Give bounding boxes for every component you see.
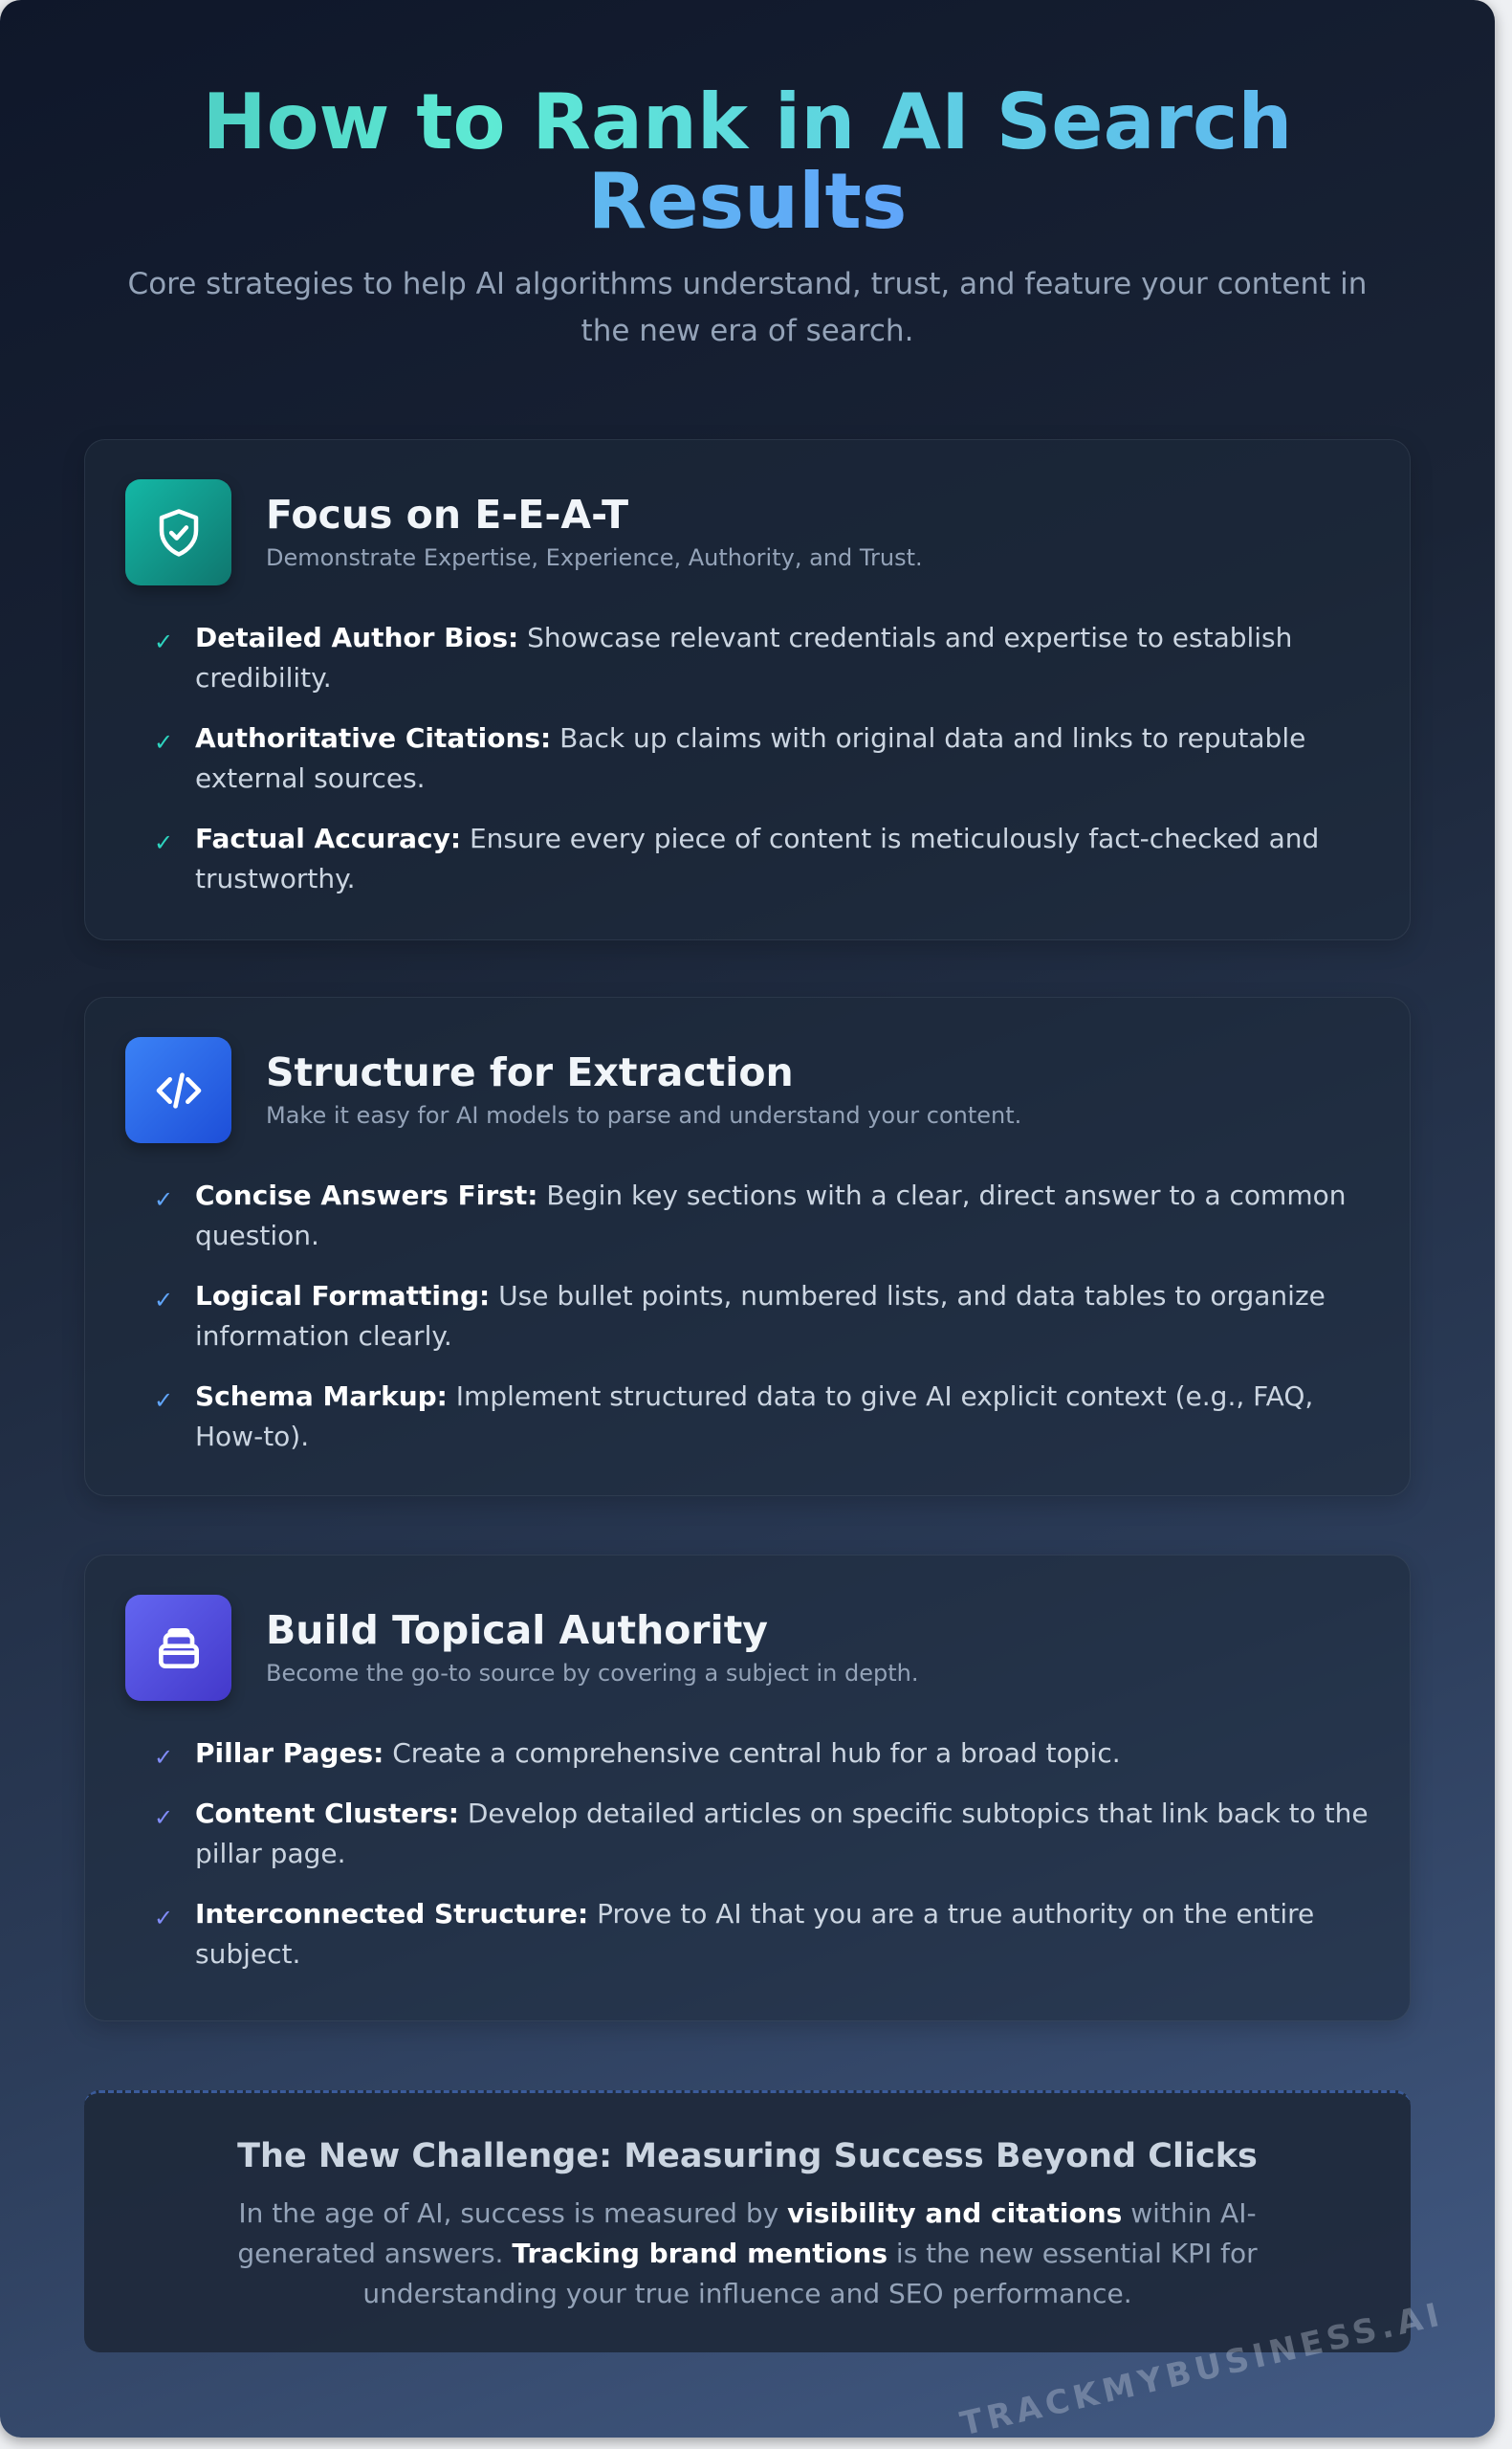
subheading: Make it easy for AI models to parse and understand your content. <box>266 1102 1021 1129</box>
heading: Build Topical Authority <box>266 1607 768 1653</box>
list <box>154 1180 1346 1452</box>
icon: code <box>125 1037 231 1143</box>
subheading: Demonstrate Expertise, Experience, Authority, and Trust. <box>266 544 923 571</box>
list: Authoritative Citations: Back up claims with original data and links to reputable external sources. <box>195 722 1305 794</box>
callout: new challenge: In the age of AI, success is measured by visibility and citations within AI-generated answers. Tracking brand mentions is the new essential KPI for understanding your true influence and SEO performance. <box>237 2197 1258 2309</box>
title: How to Rank in AI Search <box>203 77 1292 166</box>
list: Concise Answers First: Begin key sections with a clear, direct answer to a common question. <box>195 1180 1346 1251</box>
list: ✓ <box>154 729 173 756</box>
list: Detailed Author Bios: Showcase relevant credentials and expertise to establish credibility. <box>195 622 1292 694</box>
list: ✓ <box>154 1287 173 1313</box>
heading: Structure for Extraction <box>266 1049 794 1095</box>
list: ✓ <box>154 829 173 856</box>
list: ✓ <box>154 1804 173 1831</box>
title <box>203 77 1292 246</box>
subtitle: Core strategies to help AI algorithms understand, trust, and feature your content in the new era of search. <box>128 267 1367 348</box>
panel: topical authority <box>84 1555 1411 2021</box>
list: ✓ <box>154 1744 173 1771</box>
icon: layers <box>125 1595 231 1701</box>
title: Results <box>588 157 907 246</box>
list: Pillar Pages: Create a comprehensive central hub for a broad topic. <box>195 1737 1121 1769</box>
list: ✓ <box>154 1387 173 1414</box>
list: ✓ <box>154 1905 173 1931</box>
list: ✓ <box>154 1186 173 1213</box>
list: Schema Markup: Implement structured data to give AI explicit context (e.g., FAQ, How‑to). <box>195 1380 1313 1452</box>
callout: new challenge <box>84 2090 1411 2352</box>
callout: new challenge: The New Challenge: Measuring Success Beyond Clicks <box>237 2137 1258 2175</box>
list <box>154 1737 1369 1970</box>
list <box>154 622 1319 894</box>
panel: E-E-A-T <box>84 439 1411 940</box>
list: Logical Formatting: Use bullet points, numbered lists, and data tables to organize information clearly. <box>195 1280 1326 1352</box>
list: ✓ <box>154 629 173 655</box>
list: Content Clusters: Develop detailed articles on specific subtopics that link back to the pillar page. <box>195 1798 1369 1869</box>
heading: Focus on E-E-A-T <box>266 492 628 538</box>
icon: shield <box>125 479 231 585</box>
panel: structure <box>84 997 1411 1496</box>
list: Interconnected Structure: Prove to AI that you are a true authority on the entire subject. <box>195 1898 1314 1970</box>
list: Factual Accuracy: Ensure every piece of content is meticulously fact-checked and trustworthy. <box>195 823 1319 894</box>
subheading: Become the go-to source by covering a subject in depth. <box>266 1660 918 1687</box>
